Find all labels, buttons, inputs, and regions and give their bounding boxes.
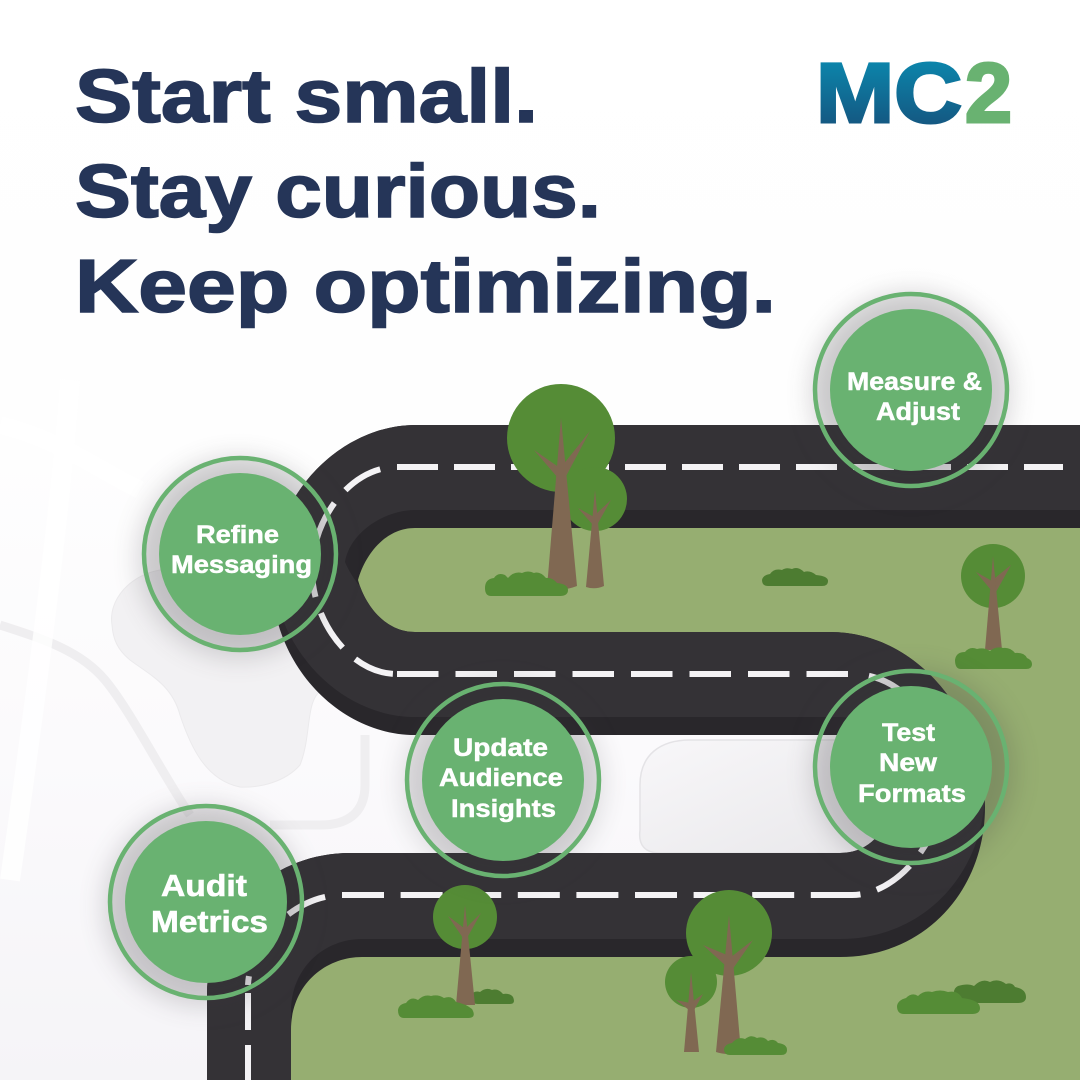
- title: Keep optimizing.: [75, 244, 776, 328]
- step: Measure & Adjust: [811, 292, 1011, 492]
- faint map background: [0, 380, 900, 880]
- grass land: [250, 490, 1080, 1080]
- tree: lower centre pair with bush: [665, 890, 787, 1055]
- title: [75, 54, 776, 328]
- tree: lower left with bushes: [398, 885, 514, 1018]
- step: Audit Metrics: Audit: [161, 868, 247, 903]
- step: Measure & Adjust: Measure &: [847, 368, 982, 396]
- logo: MC2: [816, 46, 1012, 140]
- logo: MC2: 2: [965, 46, 1012, 140]
- bushes: lower right field: [897, 980, 1026, 1014]
- winding road: [207, 407, 1080, 1080]
- step: Refine Messaging: Refine: [196, 521, 279, 549]
- step: Test New Formats: [811, 668, 1015, 872]
- title: Stay curious.: [75, 149, 601, 233]
- tree: large and small trees with bush, upper bend: [485, 384, 627, 596]
- step: Update Audience Insights: [403, 682, 603, 882]
- title: Start small.: [75, 54, 538, 138]
- step: Update Audience Insights: Insights: [451, 795, 556, 823]
- tree: right field with bush: [955, 544, 1032, 669]
- step: Measure & Adjust: Adjust: [876, 398, 961, 426]
- step: Update Audience Insights: Update: [453, 734, 548, 762]
- step: Update Audience Insights: Audience: [439, 764, 563, 792]
- step: Refine Messaging: [138, 458, 338, 658]
- logo: MC2: MC: [816, 46, 962, 140]
- road centre dashes: [248, 467, 1063, 1080]
- bush: middle field: [762, 568, 828, 586]
- step: Test New Formats: Test: [882, 719, 936, 747]
- step: Test New Formats: New: [879, 749, 938, 777]
- step: Refine Messaging: Messaging: [171, 551, 312, 579]
- step: Test New Formats: Formats: [858, 780, 966, 808]
- step: Audit Metrics: Metrics: [151, 904, 268, 939]
- step: Audit Metrics: [104, 806, 304, 1006]
